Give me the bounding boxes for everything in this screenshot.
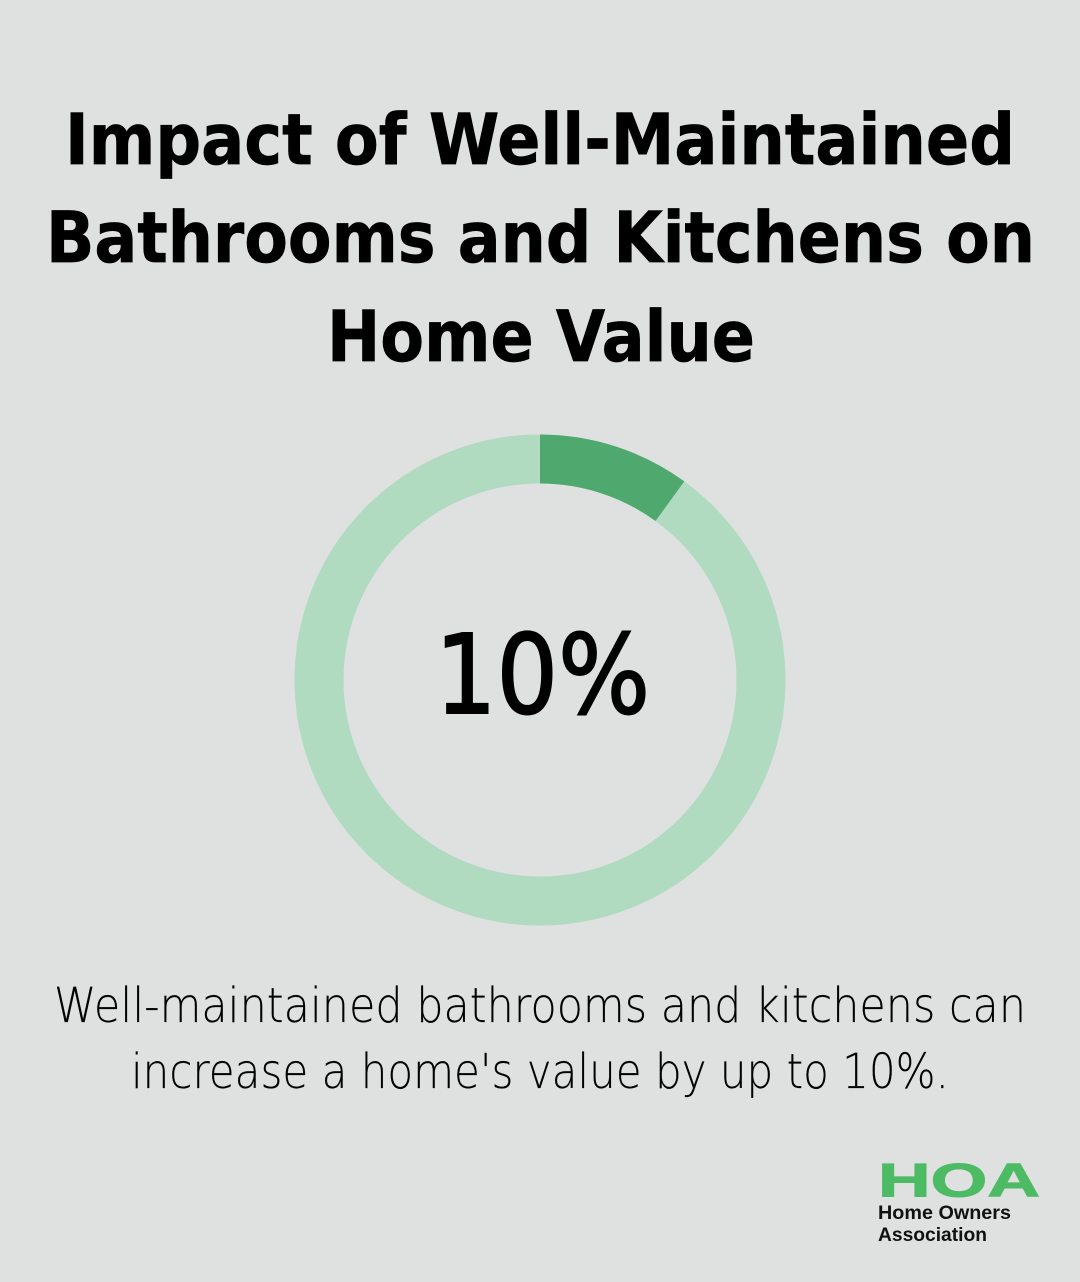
logo caption [878,1203,1011,1246]
logo wordmark: HOA [878,1154,1040,1206]
logo: HOA Home Owners Association [878,1154,1040,1246]
title: Impact of Well-Maintained [65,99,1015,181]
title [46,99,1035,378]
donut highlighted segment [540,434,684,521]
donut value: 10% [435,611,650,739]
logo caption: Association [878,1225,987,1246]
description text: increase a home's value by up to 10%. [131,1044,949,1100]
donut track [319,459,761,901]
donut chart: 10% [319,434,761,901]
logo caption: Home Owners [878,1203,1011,1224]
title: Home Value [327,296,755,378]
description text [54,978,1026,1100]
